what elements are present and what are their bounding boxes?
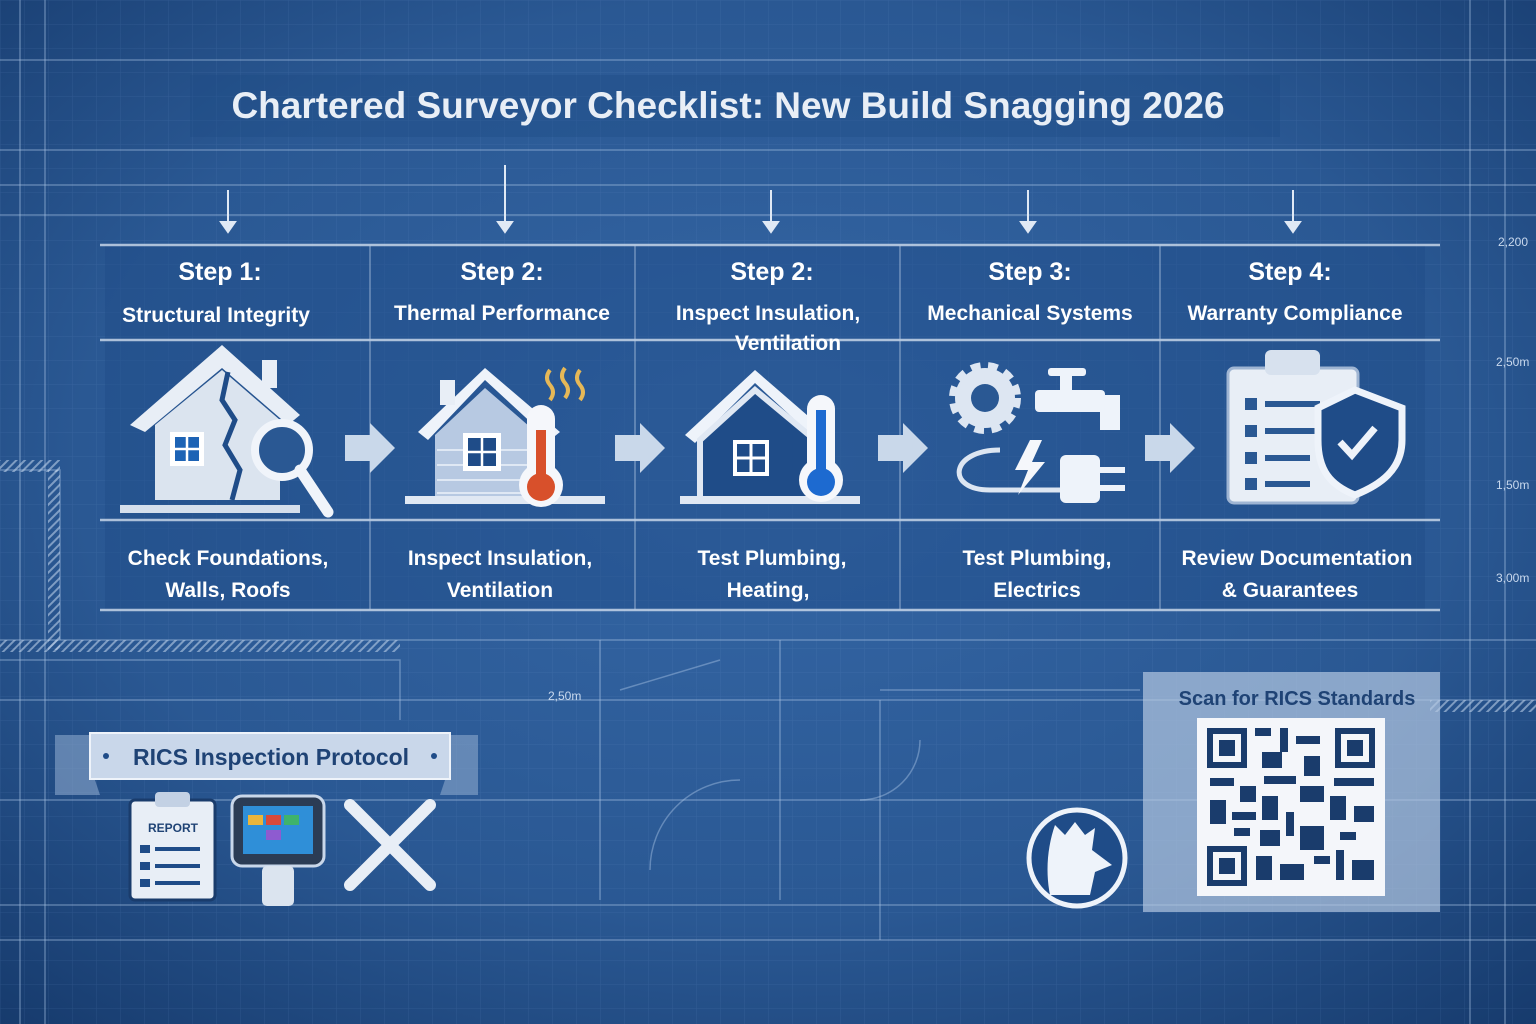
icon: clipboard with shield [1228, 350, 1402, 503]
QR panel [1143, 672, 1440, 912]
step 1 text: Check Foundations, [128, 547, 328, 570]
icon: report clipboard: REPORT [148, 821, 199, 835]
icon: house with thermometer [405, 368, 605, 507]
title: Chartered Surveyor Checklist: New Build Snagging 2026 [231, 85, 1225, 126]
step 4 text [1181, 547, 1413, 602]
icon: house with blue thermometer [680, 370, 860, 504]
step 2b header: Ventilation [735, 332, 841, 355]
step 2b header: Inspect Insulation, [676, 302, 860, 325]
arrow [615, 423, 665, 473]
down arrows [221, 165, 1300, 232]
arrow [345, 423, 395, 473]
step 3 header: Step 3: [988, 258, 1072, 286]
dimension labels: 2,200 [1498, 235, 1528, 249]
dimension labels: 1,50m [1496, 478, 1529, 492]
icon: thermal camera [232, 796, 324, 906]
dimension labels [548, 235, 1529, 703]
dimension labels: 3,00m [1496, 571, 1529, 585]
icon: gear, tap, plug [955, 368, 1125, 503]
icon: wrench and spanner [350, 805, 430, 885]
step 2b text: Heating, [727, 579, 809, 602]
step 2 header: Step 2: [460, 258, 544, 286]
step 4 header [1187, 258, 1403, 325]
icon: cracked house with magnifier [120, 345, 328, 513]
dimension labels: 2,50m [548, 689, 581, 703]
arrow [878, 423, 928, 473]
step 4 text: Review Documentation [1181, 547, 1413, 570]
arrow [1145, 423, 1195, 473]
step 1 header: Structural Integrity [122, 304, 310, 327]
step 1 header [122, 258, 310, 327]
RICS protocol banner: RICS Inspection Protocol [133, 744, 409, 770]
step 1 text [128, 547, 328, 602]
step 3 text [963, 547, 1111, 602]
step 3 header: Mechanical Systems [927, 302, 1133, 325]
step 2 text: Inspect Insulation, [408, 547, 592, 570]
title [190, 75, 1280, 137]
step 2b header: Step 2: [730, 258, 814, 286]
step 2 header [394, 258, 610, 325]
step 2b text [698, 547, 846, 602]
RICS protocol banner [55, 733, 478, 795]
step 4 text: & Guarantees [1222, 579, 1358, 602]
step 2 text: Ventilation [447, 579, 553, 602]
QR panel: Scan for RICS Standards [1179, 688, 1415, 710]
dimension labels: 2,50m [1496, 355, 1529, 369]
step 3 text: Electrics [993, 579, 1081, 602]
step 4 header: Step 4: [1248, 258, 1332, 286]
step 3 header [927, 258, 1133, 325]
step 2 header: Thermal Performance [394, 302, 610, 325]
step 2b header [676, 258, 860, 355]
step 3 text: Test Plumbing, [963, 547, 1111, 570]
step 2 text [408, 547, 592, 602]
RICS lion logo [1029, 810, 1125, 906]
step 4 header: Warranty Compliance [1187, 302, 1403, 325]
step 2b text: Test Plumbing, [698, 547, 846, 570]
icon: report clipboard [130, 792, 215, 900]
step 1 text: Walls, Roofs [165, 579, 291, 602]
step 1 header: Step 1: [178, 258, 262, 286]
steps panel [100, 245, 1440, 610]
